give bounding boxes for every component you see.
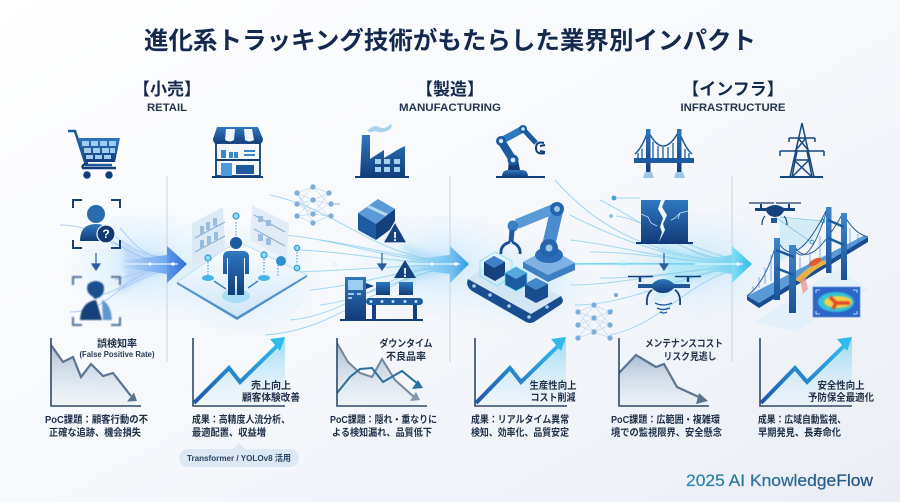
- icon: conveyor machine with warning: !: [403, 265, 407, 280]
- icon: inspection drone: [628, 276, 701, 313]
- flow lines: infrastructure: [555, 180, 735, 335]
- chart: infrastructure maintenance and risk: リスク見逃し: [664, 350, 716, 363]
- icon: power pylon: [780, 123, 824, 177]
- arrow: retail flow: [120, 246, 187, 283]
- scene: retail floor with tracked person: [177, 205, 307, 320]
- chart: manufacturing growth: [475, 337, 576, 406]
- icon: suspension bridge: [634, 129, 694, 178]
- heading: infrastructure: INFRASTRUCTURE: [680, 102, 786, 114]
- chart: manufacturing downtime and defects: ダウンタイム: [380, 337, 432, 350]
- chart: infrastructure maintenance and risk: [619, 338, 723, 406]
- text: infrastructure challenge: [611, 413, 722, 439]
- chart: manufacturing downtime and defects: 不良品率: [386, 350, 426, 363]
- heading: infrastructure: 【インフラ】: [682, 80, 784, 99]
- chart: manufacturing growth: コスト削減: [530, 391, 576, 404]
- heading: manufacturing: MANUFACTURING: [399, 102, 501, 114]
- badge: Transformer / YOLOv8: Transformer / YOLOv8 活用: [187, 453, 291, 463]
- badge: Transformer / YOLOv8: [179, 443, 299, 467]
- chart: retail false positive rate: 誤検知率: [97, 337, 137, 350]
- icon: cracked structure: [636, 200, 693, 244]
- glow: central flow band: [60, 203, 785, 338]
- scene: bridge with drone and heatmap: [747, 203, 868, 332]
- heading: manufacturing: 【製造】: [416, 80, 484, 99]
- chart: infrastructure maintenance and risk: メンテナンスコスト: [645, 338, 723, 350]
- icon: factory: [355, 124, 409, 178]
- text: infrastructure result: [758, 413, 846, 439]
- text: retail result: 成果：高精度人流分析、: [192, 413, 290, 426]
- scene: robot arm and conveyor: [467, 202, 575, 323]
- icon: neural network lower: [575, 302, 613, 341]
- text: manufacturing challenge: よる検知漏れ、品質低下: [332, 426, 432, 439]
- text: infrastructure result: 成果：広域自動監視、: [758, 413, 846, 426]
- heading: infrastructure: [680, 80, 786, 114]
- text: retail challenge: [45, 413, 148, 439]
- icon: box with warning: [358, 199, 407, 244]
- text: infrastructure challenge: 境での監視限界、安全懸念: [611, 426, 722, 439]
- arrow: infrastructure step: [660, 253, 668, 270]
- chart: manufacturing downtime and defects: [337, 337, 432, 406]
- text: manufacturing challenge: PoC課題：隠れ・重なりに: [330, 413, 437, 426]
- title: 進化系トラッキング技術がもたらした業界別インパクト: [144, 26, 756, 55]
- heading: retail: RETAIL: [147, 102, 187, 114]
- icon: blurred person: [73, 277, 120, 325]
- icon: box with warning: !: [393, 229, 397, 244]
- text: manufacturing result: 成果：リアルタイム異常: [471, 413, 569, 426]
- icon: person with question mark: ?: [102, 227, 110, 241]
- arrow: manufacturing step: [378, 253, 386, 270]
- text: manufacturing challenge: [330, 413, 437, 439]
- flow lines: retail: [60, 225, 170, 312]
- heading: retail: [133, 79, 201, 114]
- text: retail challenge: 正確な追跡、機会損失: [49, 426, 141, 439]
- flow lines: manufacturing: [265, 195, 452, 335]
- chart: retail growth: [193, 337, 300, 406]
- arrow: manufacturing flow: [405, 246, 469, 283]
- icon: conveyor machine with warning: [340, 260, 423, 321]
- footer brand: 2025 AI KnowledgeFlow: [686, 471, 874, 490]
- chart: manufacturing growth: 生産性向上: [530, 379, 576, 392]
- text: retail challenge: PoC課題：顧客行動の不: [45, 413, 148, 426]
- chart: retail growth: 売上向上: [251, 379, 291, 392]
- icon: robot arm: [496, 125, 545, 178]
- text: retail result: 最適配置、収益増: [192, 426, 266, 439]
- heading: retail: 【小売】: [133, 79, 201, 99]
- text: retail result: [192, 413, 290, 439]
- text: manufacturing result: 検知、効率化、品質安定: [471, 426, 569, 439]
- text: infrastructure result: 早期発見、長寿命化: [758, 426, 841, 439]
- icon: neural network upper: [294, 184, 340, 226]
- chart: retail false positive rate: [51, 337, 155, 406]
- chart: infrastructure growth: 安全性向上: [818, 379, 864, 392]
- heading: manufacturing: [399, 80, 501, 114]
- chart: infrastructure growth: 予防保全最適化: [808, 391, 874, 404]
- text: infrastructure challenge: PoC課題：広範囲・複雑環: [611, 413, 720, 426]
- icon: store: [212, 127, 263, 178]
- arrow: infrastructure flow: [690, 246, 752, 283]
- icon: person with question mark: [73, 200, 120, 248]
- chart: retail growth: 顧客体験改善: [242, 391, 300, 404]
- arrow: retail step: [92, 253, 100, 270]
- text: manufacturing result: [471, 413, 569, 439]
- chart: infrastructure growth: [760, 337, 874, 406]
- chart: retail false positive rate: (False Positive Rate): [80, 350, 155, 359]
- icon: shopping cart: [68, 131, 120, 179]
